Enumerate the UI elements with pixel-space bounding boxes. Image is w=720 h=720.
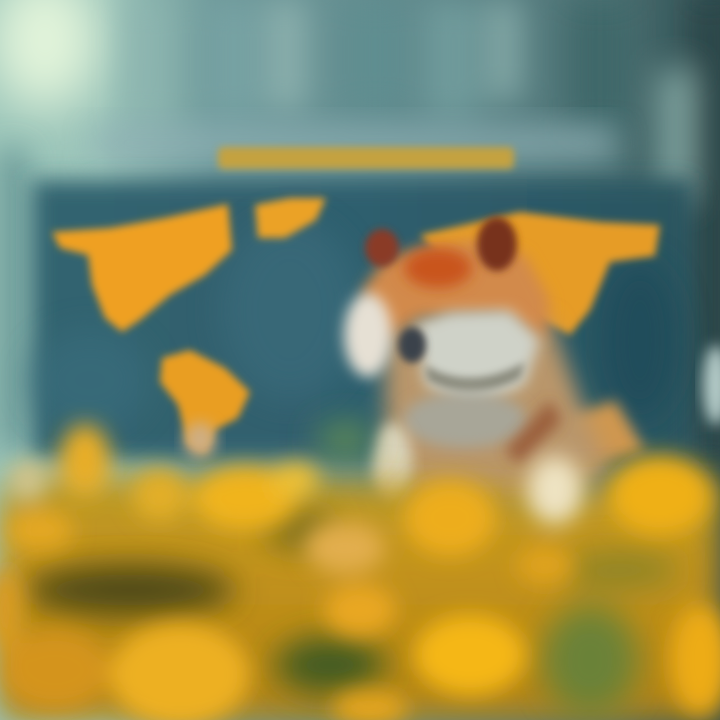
dog head fur: [362, 240, 550, 340]
panel: world map board: [30, 180, 692, 460]
continent: Greenland: [255, 198, 326, 238]
dog body: [385, 320, 610, 510]
dog cheek white: [344, 293, 392, 377]
dog muzzle: [415, 310, 540, 410]
dog left ear: [365, 229, 399, 267]
continent: Eurasia: [420, 212, 660, 335]
map: continents: [52, 198, 660, 470]
dog chest: [403, 392, 527, 448]
continent: South America: [160, 350, 250, 452]
flower blooms: [0, 424, 720, 720]
dog nose and mouth: [398, 327, 426, 363]
heading: blurred yellow title bar: [218, 147, 514, 169]
foreground: yellow flower field: [0, 422, 720, 720]
continent: North America: [52, 204, 232, 332]
decorative element: pale object at right edge: [703, 345, 720, 425]
icon: shiba inu dog: [344, 217, 610, 510]
continent: lower right land: [560, 400, 645, 470]
dark foliage: [25, 422, 680, 715]
dog right ear: [477, 217, 517, 271]
